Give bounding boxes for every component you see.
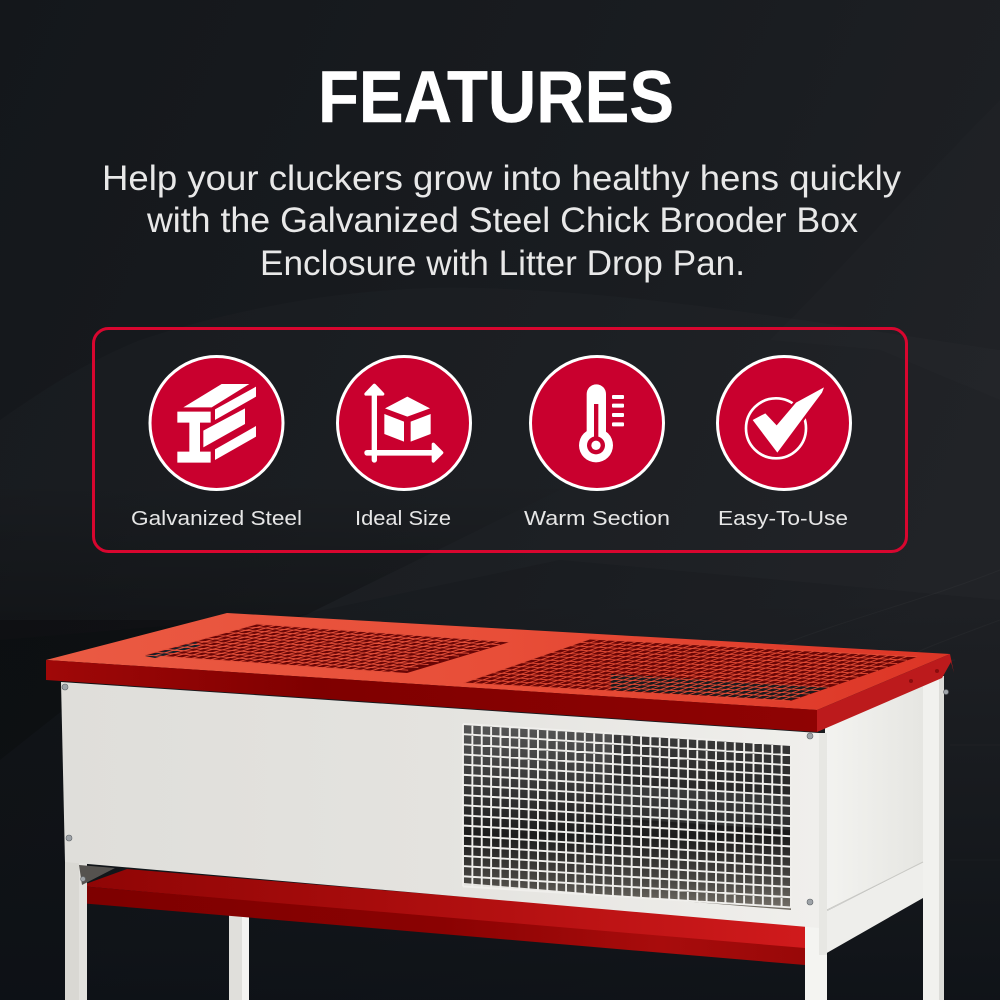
front mesh [463,724,791,910]
lid mesh left [145,624,510,673]
back legs [229,676,944,1000]
screws [62,684,948,905]
feature: ideal size [338,356,470,530]
lid [46,613,954,732]
label: Galvanized Steel [131,507,302,530]
label: Ideal Size [355,507,451,530]
intro text [102,159,902,283]
feature: easy-to-use [718,356,850,530]
front panel [61,682,819,928]
product: brooder box [46,613,954,1000]
panel: features [94,328,906,552]
label: Easy-To-Use [718,507,848,530]
front left leg [65,860,115,1000]
intro text: Help your cluckers grow into healthy hens quickly [102,159,902,198]
icon: check mark [746,387,824,458]
title: FEATURES [318,57,674,138]
lid mesh right [464,639,917,701]
intro text: Enclosure with Litter Drop Pan. [260,244,745,283]
front right leg [805,733,827,1000]
icon: steel beam [177,384,256,463]
side panel [825,682,923,954]
intro text: with the Galvanized Steel Chick Brooder Box [146,201,859,240]
icon: dimensions box [364,385,442,463]
feature: warm section [524,356,670,530]
icon: thermometer [579,384,624,462]
litter drop pan [79,869,805,965]
label: Warm Section [524,507,670,530]
feature: galvanized steel [131,356,302,530]
